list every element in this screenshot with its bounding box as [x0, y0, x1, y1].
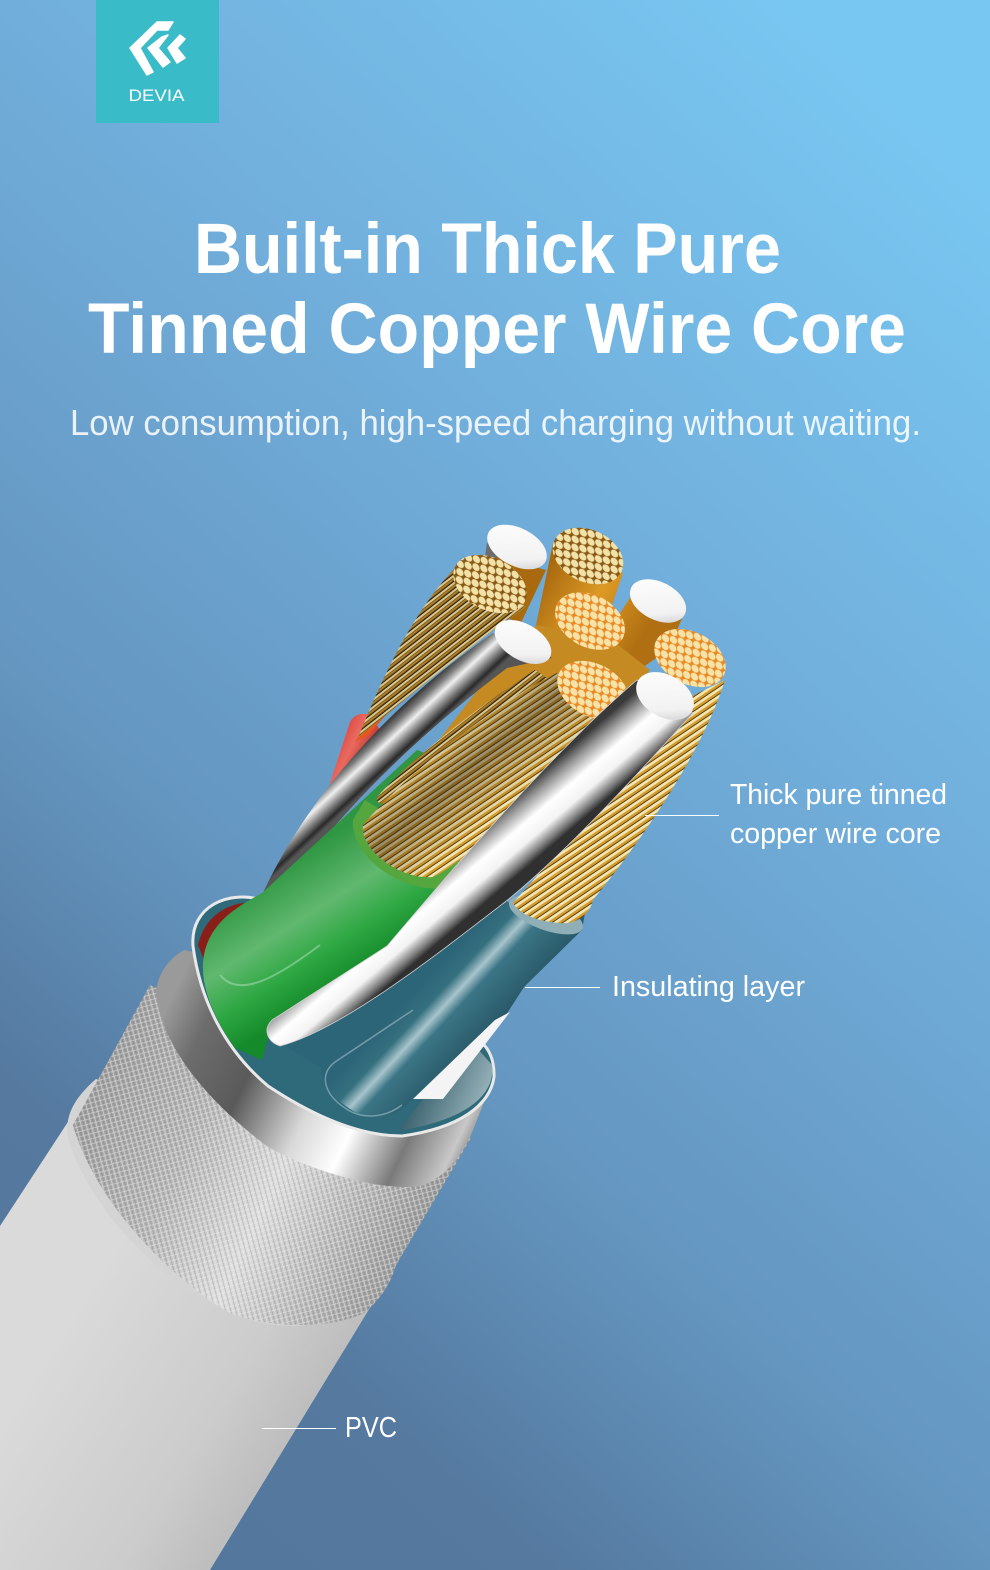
knurled metal collar	[73, 985, 471, 1325]
gold strand right	[513, 680, 725, 923]
shiny wire piece in ring	[413, 1012, 510, 1099]
logo: DEVIA badge: DEVIA	[128, 86, 185, 105]
callout: thick pure tinned copper wire core: copper wire core	[730, 818, 941, 850]
copper cap centre	[545, 581, 635, 661]
logo: DEVIA badge	[96, 0, 219, 123]
silver wire rear left	[262, 611, 559, 895]
front silver wire	[267, 662, 702, 1046]
illustration: cutaway cable	[0, 516, 736, 1570]
callout: thick pure tinned copper wire core	[645, 779, 947, 850]
callout: PVC	[262, 1412, 397, 1444]
jacket lip	[67, 1079, 404, 1326]
orange glimpse between strands	[425, 745, 482, 815]
silver ring band	[156, 950, 494, 1187]
front tinned strand with green sleeve lip	[353, 649, 639, 889]
red insulated wire	[198, 705, 395, 965]
pale gold strand	[444, 698, 642, 888]
back copper strand	[535, 517, 633, 640]
title	[88, 210, 906, 369]
thin gold strand	[377, 670, 565, 803]
icon: DEVIA chevrons	[130, 22, 185, 75]
callout: thick pure tinned copper wire core: Thick pure tinned	[730, 779, 947, 811]
copper cap right	[644, 617, 736, 699]
teal insulator	[268, 888, 588, 1117]
back silver wire with gold body	[480, 516, 554, 625]
title: Built-in Thick Pure	[194, 210, 781, 289]
callout: insulating layer: Insulating layer	[612, 971, 805, 1003]
title: Tinned Copper Wire Core	[88, 290, 906, 369]
callout: PVC: PVC	[345, 1412, 397, 1444]
central copper mass	[400, 625, 650, 840]
white PVC jacket	[0, 1079, 396, 1570]
ring opening	[193, 897, 494, 1136]
green insulator	[203, 750, 470, 1060]
tinned strand top left	[358, 543, 537, 738]
rear silver wire with orange body	[590, 570, 693, 690]
subtitle: Low consumption, high-speed charging without waiting.	[70, 402, 921, 443]
ring interior reflection	[400, 1040, 492, 1130]
